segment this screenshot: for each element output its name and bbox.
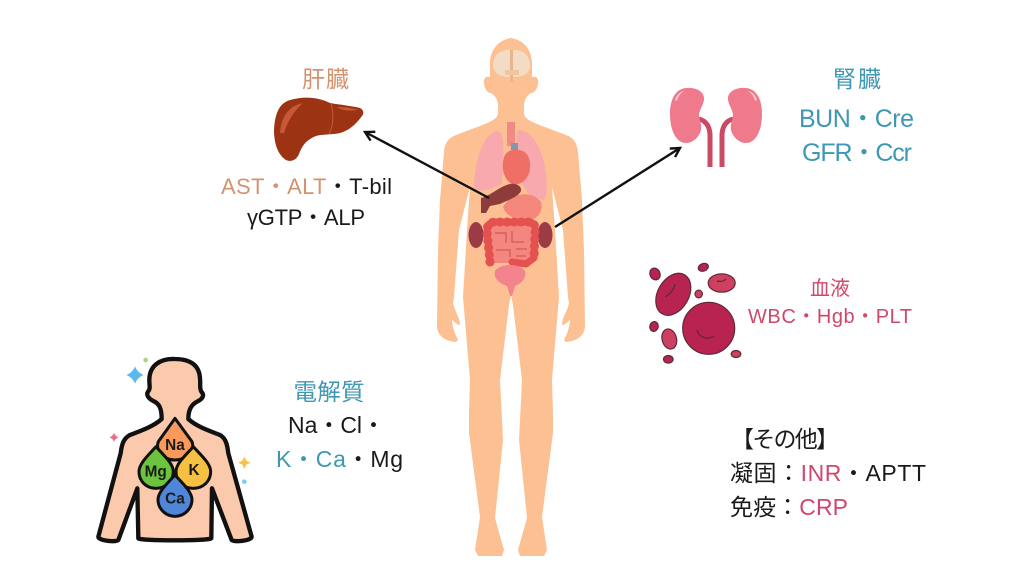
drop: Mg [139,447,173,488]
heart [503,143,530,184]
liver tests line 1: AST・ALT・T-bil [221,174,392,199]
heading: liver: 肝臓 [302,66,349,92]
blood tests: WBC・Hgb・PLT [748,306,912,328]
bladder [495,265,525,296]
body silhouette [437,38,585,556]
large intestine [487,222,535,264]
drop: Ca [158,475,192,516]
kidneys [468,222,552,248]
arrow: to liver [365,132,489,198]
arrow: to kidney [555,148,680,227]
electrolytes line 2: K・Ca・Mg [276,446,403,472]
kidney tests line 2: GFR・Ccr [802,139,912,167]
liver in body [481,184,521,213]
drop: Ca: Ca [165,491,185,508]
other tests heading: 【その他】 [731,426,839,452]
heading: kidney: 腎臓 [833,66,881,92]
immunity tests: 免疫：CRP [730,494,848,520]
icon: blood cells [648,262,741,363]
drop: Mg: Mg [145,463,167,480]
drop: Na: Na [165,437,185,454]
drop: K: K [188,462,200,479]
trachea [507,122,515,146]
drop: K [176,447,211,488]
electrolytes line 1: Na・Cl・ [288,412,385,438]
icon: electrolytes body [98,358,252,541]
kidney tests line 1: BUN・Cre [799,105,914,133]
brain [493,50,530,82]
drop: Na [158,418,193,460]
stomach [503,194,542,220]
icon: liver [274,98,363,161]
small intestine [489,225,531,263]
human body figure [437,38,585,556]
sparkles [110,358,251,484]
icon: kidneys [670,88,762,167]
lungs [474,130,547,200]
heading: blood: 血液 [810,277,850,300]
coagulation tests: 凝固：INR・APTT [730,460,926,486]
heading: electrolytes: 電解質 [294,379,364,405]
liver tests line 2: γGTP・ALP [247,205,365,230]
